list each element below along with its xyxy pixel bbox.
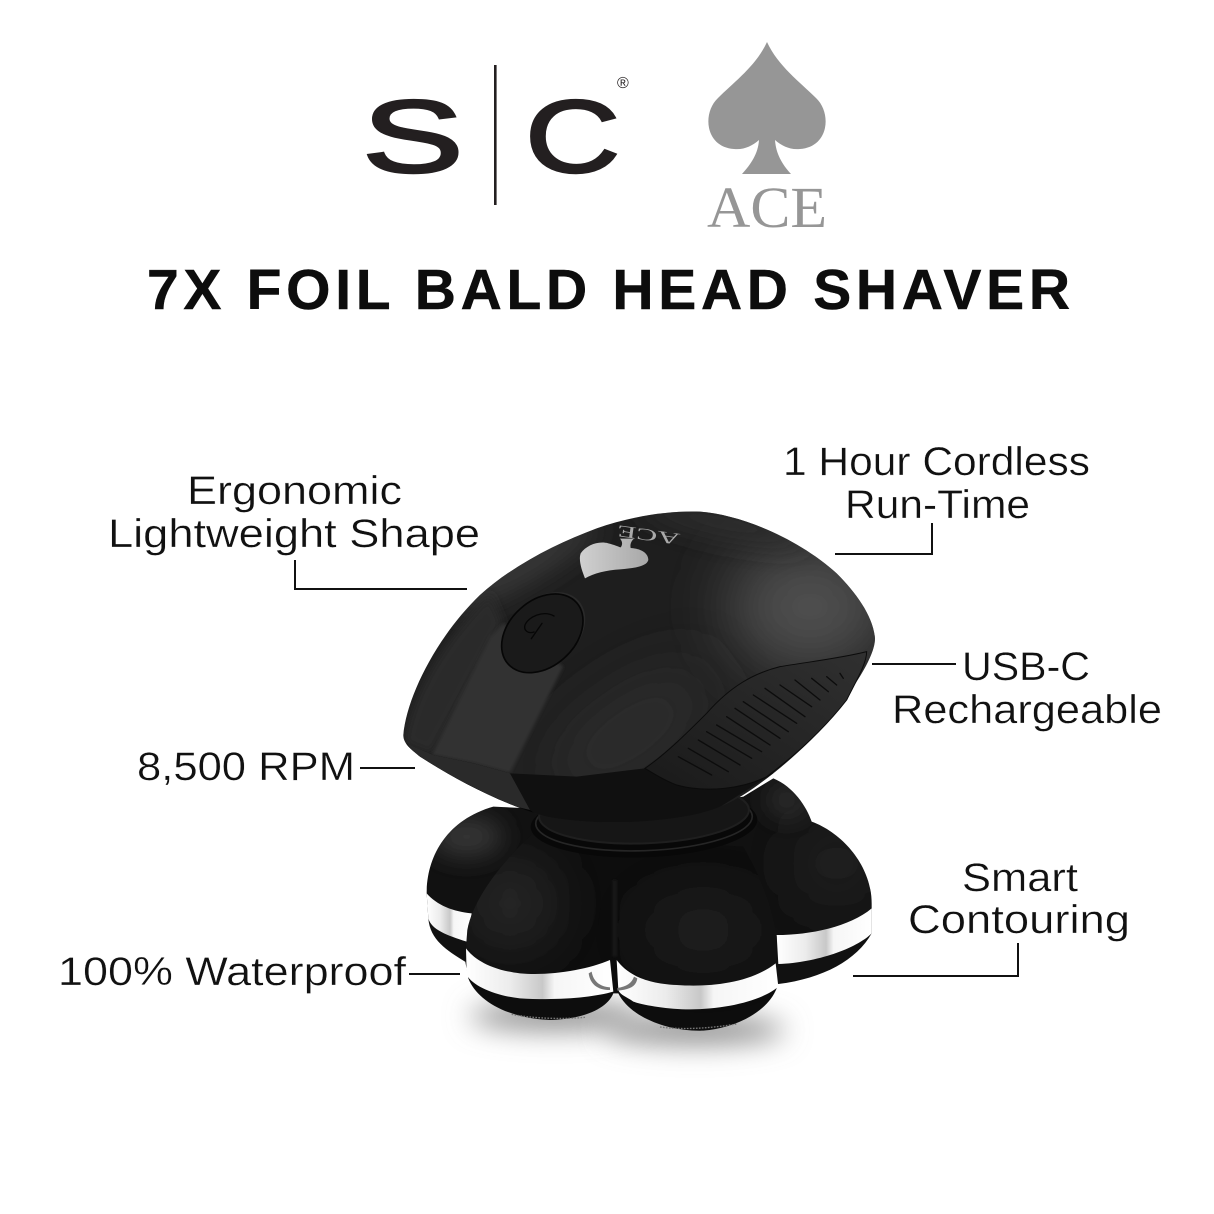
logo: ACE spade xyxy=(707,42,827,240)
centre chrome reflections xyxy=(589,972,637,991)
callout text: USB-C xyxy=(962,645,1090,689)
left chrome band xyxy=(427,893,472,942)
body shell xyxy=(403,512,875,822)
power button xyxy=(486,576,601,689)
title: 7X FOIL BALD HEAD SHAVER xyxy=(147,258,1070,322)
handle body xyxy=(403,512,875,814)
foil teeth left xyxy=(512,1014,585,1018)
leader line xyxy=(835,523,932,554)
callout: smart contouring xyxy=(853,856,1130,976)
callout text: Smart xyxy=(962,856,1078,900)
callout text: Run-Time xyxy=(845,483,1030,527)
callout text: 1 Hour Cordless xyxy=(783,440,1090,484)
leader line xyxy=(295,560,467,589)
front right chrome band xyxy=(617,960,778,1009)
callout text: 8,500 RPM xyxy=(137,745,355,789)
callout text: Rechargeable xyxy=(892,688,1162,732)
body ACE mark: ACE xyxy=(616,521,681,548)
body shading xyxy=(404,512,875,822)
leader line xyxy=(360,767,415,769)
base shadow xyxy=(470,1002,785,1044)
icon: spade xyxy=(708,42,826,174)
foil teeth right xyxy=(660,1024,737,1029)
callout text: Contouring xyxy=(908,898,1130,942)
leader line xyxy=(853,943,1018,976)
logo: SC brand mark xyxy=(362,65,629,205)
shaver head base xyxy=(427,778,873,1031)
front lobes xyxy=(465,833,777,1031)
grip panel xyxy=(645,652,867,789)
lobe highlights xyxy=(430,783,873,900)
right chrome band xyxy=(777,908,872,964)
neck collar xyxy=(530,780,758,861)
callout: USB-C rechargeable xyxy=(872,645,1162,732)
grip ribs xyxy=(678,673,843,775)
logo letter C: C xyxy=(525,80,620,195)
product: shaver xyxy=(403,492,893,1044)
back lobes xyxy=(427,778,872,984)
callout text: Lightweight Shape xyxy=(108,512,480,556)
logo letter S: S xyxy=(362,79,464,194)
leader line xyxy=(409,973,460,975)
ACE wordmark: ACE xyxy=(707,175,827,240)
logo divider xyxy=(494,65,497,205)
callout: run time xyxy=(783,440,1090,554)
callout: ergonomic lightweight shape xyxy=(108,469,480,589)
registered mark: ® xyxy=(617,75,629,92)
icon: spade emblem xyxy=(580,539,648,578)
callout text: Ergonomic xyxy=(187,469,402,513)
callout text: 100% Waterproof xyxy=(58,950,407,994)
front lobe highlights xyxy=(467,860,770,960)
leader line xyxy=(872,663,956,665)
icon: power symbol xyxy=(525,614,554,639)
front left chrome band xyxy=(466,948,613,999)
